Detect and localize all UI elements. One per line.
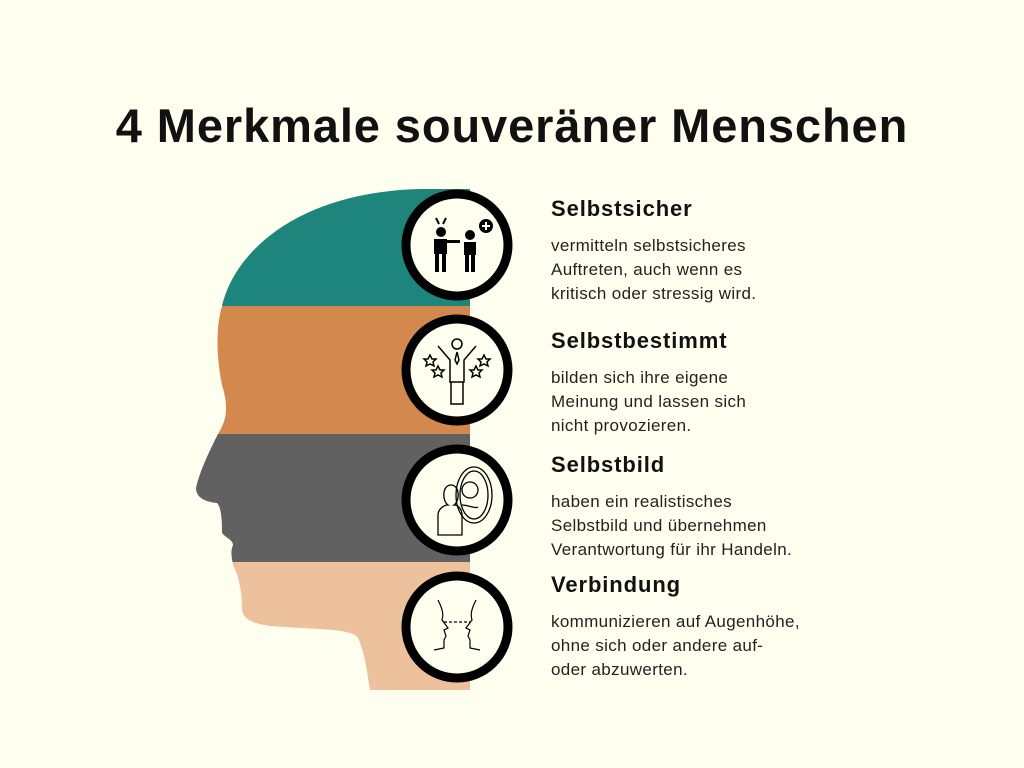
item: Selbstbild: haben ein realistisches: [551, 492, 732, 511]
icon: mirror self-image: [406, 449, 508, 551]
item: Selbstbild: Selbstbild und übernehmen: [551, 516, 767, 535]
title: 4 Merkmale souveräner Menschen: [116, 99, 908, 152]
item: Selbstbestimmt: Selbstbestimmt: [551, 328, 727, 353]
item: Selbstbild: Selbstbild: [551, 452, 665, 477]
icon: faces at eye level: [406, 576, 508, 678]
item: Verbindung: Verbindung: [551, 572, 681, 597]
item: Selbstbestimmt: nicht provozieren.: [551, 416, 691, 435]
item: Verbindung: ohne sich oder andere auf-: [551, 636, 763, 655]
item: Selbstsicher: Auftreten, auch wenn es: [551, 260, 742, 279]
item: Selbstsicher: [551, 196, 756, 303]
item: Selbstsicher: vermitteln selbstsicheres: [551, 236, 746, 255]
item: Verbindung: oder abzuwerten.: [551, 660, 688, 679]
item: Selbstbestimmt: Meinung und lassen sich: [551, 392, 746, 411]
item: Selbstbestimmt: [551, 328, 746, 435]
head graphic: [196, 189, 512, 690]
item: Selbstsicher: Selbstsicher: [551, 196, 693, 221]
icon: successful person: [406, 319, 508, 421]
item: Selbstbestimmt: bilden sich ihre eigene: [551, 368, 728, 387]
icon: confident people: [406, 194, 508, 296]
item: Verbindung: kommunizieren auf Augenhöhe,: [551, 612, 800, 631]
item: Selbstsicher: kritisch oder stressig wird.: [551, 284, 756, 303]
item: Verbindung: [551, 572, 800, 679]
item: Selbstbild: [551, 452, 792, 559]
item: Selbstbild: Verantwortung für ihr Handeln.: [551, 540, 792, 559]
